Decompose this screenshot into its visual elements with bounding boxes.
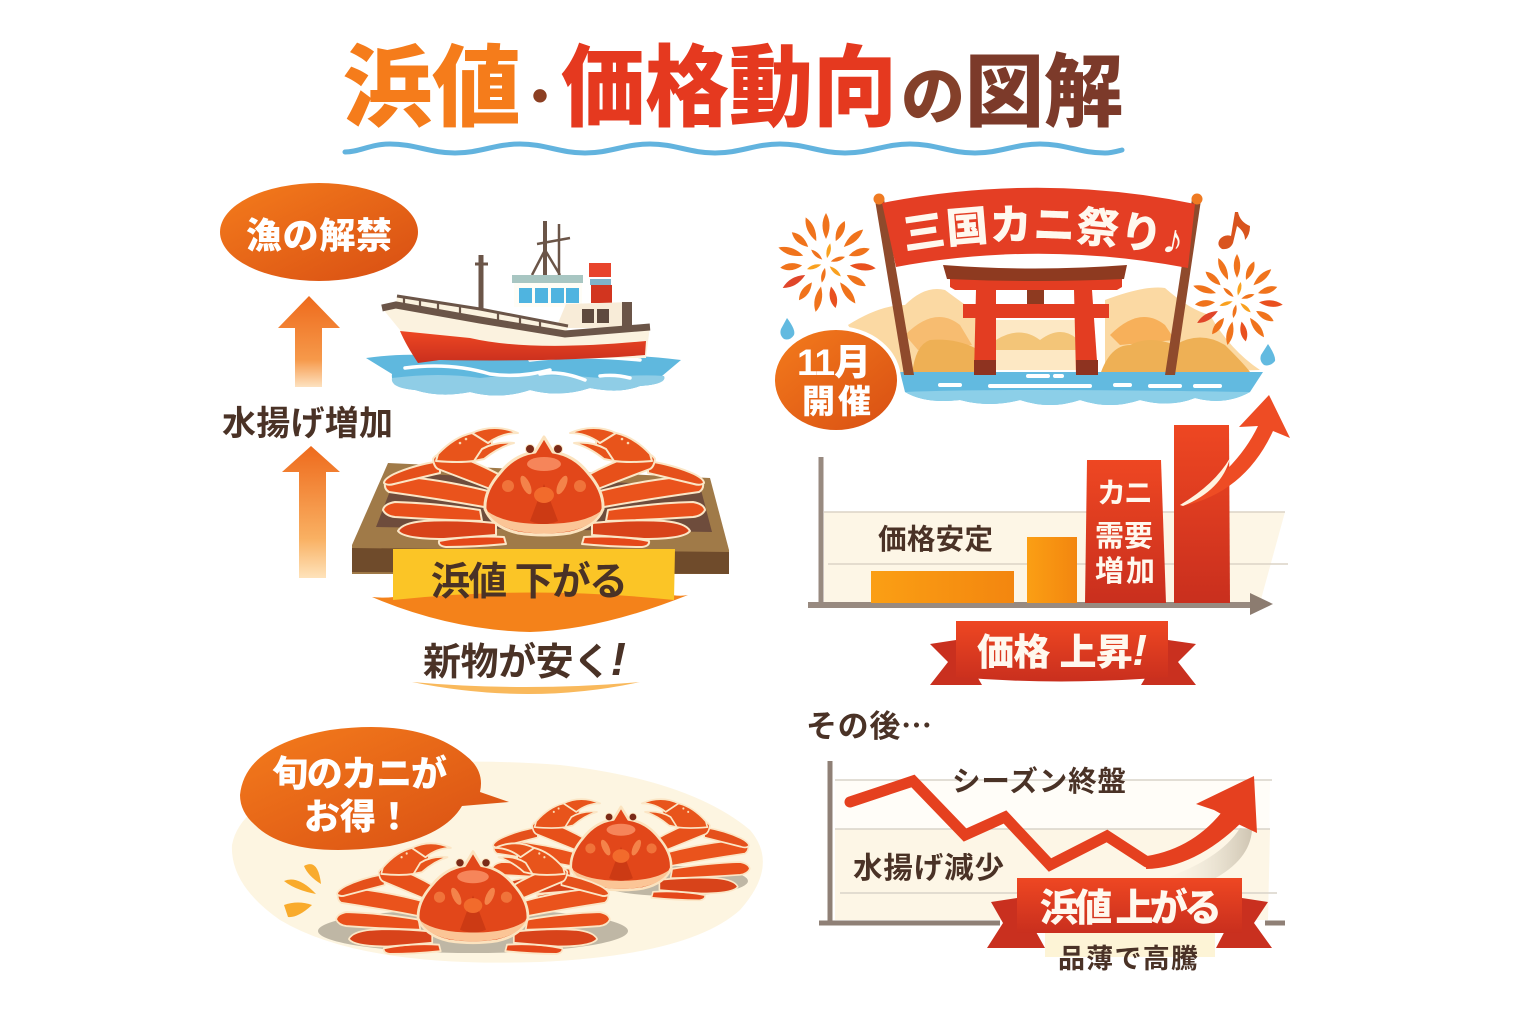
- ribbon: 浜値 上がる: [987, 878, 1272, 957]
- arrow: up top: [278, 296, 340, 387]
- callout: 漁の解禁: [220, 183, 418, 281]
- label: カニ需要増加: 増加: [1095, 555, 1155, 588]
- title: 価格動向: [561, 38, 897, 138]
- icon: fireworks left: [777, 213, 876, 313]
- speech text: [272, 753, 447, 837]
- text: 新物が安く！: 新物が安く!: [423, 633, 626, 685]
- panel: 三国カニ祭り banner and torii: [848, 188, 1263, 405]
- bar: demand: [1085, 460, 1166, 603]
- label: カニ需要増加: カニ: [1097, 478, 1153, 510]
- badge: 11月開催: 11月: [797, 342, 871, 383]
- line chart: later price movement: [819, 761, 1285, 923]
- underline swoosh: [412, 682, 640, 694]
- water: [900, 372, 1263, 405]
- axes: [808, 457, 1273, 615]
- label: 水揚げ増加: 水揚げ増加: [222, 405, 393, 443]
- crab: back: [492, 799, 750, 900]
- shade under arrow: [1160, 828, 1252, 880]
- title: 図解: [965, 48, 1123, 137]
- banner: 浜値 下がる: 浜値 下がる: [431, 561, 628, 604]
- shadow: back crab: [596, 866, 748, 896]
- festival banner text: 三国カニ祭り♪: [905, 205, 1180, 252]
- ribbon: 価格上昇！: [930, 621, 1196, 685]
- tray: [352, 463, 729, 574]
- illustration: crab on wooden tray: [352, 428, 729, 574]
- badge: 11月開催: 開催: [802, 383, 871, 420]
- speech text: 旬のカニが: [272, 753, 447, 794]
- bar chart: price rise: [808, 395, 1290, 615]
- label: 価格安定: 価格安定: [878, 524, 993, 556]
- oval: [232, 762, 763, 963]
- emphasis marks: [284, 864, 321, 917]
- poles: [874, 194, 1202, 375]
- shadow: front crab: [318, 909, 628, 953]
- icon: water drop right: [1260, 344, 1275, 366]
- trend arrow head: [1196, 776, 1257, 833]
- bar: rising: [1027, 537, 1077, 603]
- arrow: up lower: [282, 446, 340, 578]
- title: ・: [516, 72, 564, 125]
- water: [366, 354, 681, 396]
- chart band: [824, 512, 1285, 603]
- trend line: [850, 781, 1147, 865]
- text: その後…: その後⋯: [806, 701, 932, 746]
- icon: water drop left: [780, 318, 794, 340]
- panel: cream oval with crabs: [232, 727, 763, 963]
- ribbon: 価格上昇！: 価格 上昇!: [977, 626, 1147, 675]
- crab: [383, 428, 705, 547]
- axes: [819, 761, 1285, 923]
- title: 浜値: [343, 38, 521, 138]
- torii: [943, 265, 1127, 375]
- bar: stable: [871, 571, 1014, 603]
- icon: fireworks right: [1192, 254, 1283, 346]
- crab: front: [336, 843, 610, 954]
- ribbon: 浜値 上がる: 浜値 上がる: [1040, 887, 1222, 930]
- icon: music note: [1218, 212, 1250, 249]
- wheelhouse: [512, 275, 632, 328]
- label: シーズン終盤: シーズン終盤: [952, 765, 1126, 798]
- trend arrow body: [1146, 808, 1242, 869]
- deck rail: [382, 296, 650, 334]
- glow panel: [1045, 933, 1215, 957]
- hull: [382, 305, 650, 362]
- speech text: お得！: [304, 796, 412, 837]
- label: カニ需要増加: [1095, 478, 1155, 588]
- hull red: [400, 331, 646, 363]
- rail panels: [396, 297, 568, 334]
- title wave underline: [345, 144, 1122, 153]
- title: [343, 38, 1123, 138]
- banner: 浜値 下がる: [372, 549, 688, 632]
- callout: 漁の解禁: 漁の解禁: [246, 215, 392, 256]
- festival banner: [882, 188, 1195, 268]
- band: [835, 780, 1270, 920]
- bar: highest: [1174, 425, 1230, 603]
- title: の: [901, 61, 965, 133]
- arrow: rising swoosh: [1180, 395, 1290, 506]
- label: カニ需要増加: 需要: [1095, 521, 1153, 553]
- masts: [475, 221, 570, 310]
- mountains: [848, 288, 1260, 375]
- label: 水揚げ減少: 水揚げ減少: [853, 852, 1004, 885]
- speech bubble: [240, 727, 509, 850]
- funnel: [589, 263, 612, 303]
- caption: 品薄で高騰: 品薄で高騰: [1058, 944, 1198, 974]
- icon: fishing boat: [366, 221, 681, 396]
- badge: 11月開催: [773, 328, 899, 432]
